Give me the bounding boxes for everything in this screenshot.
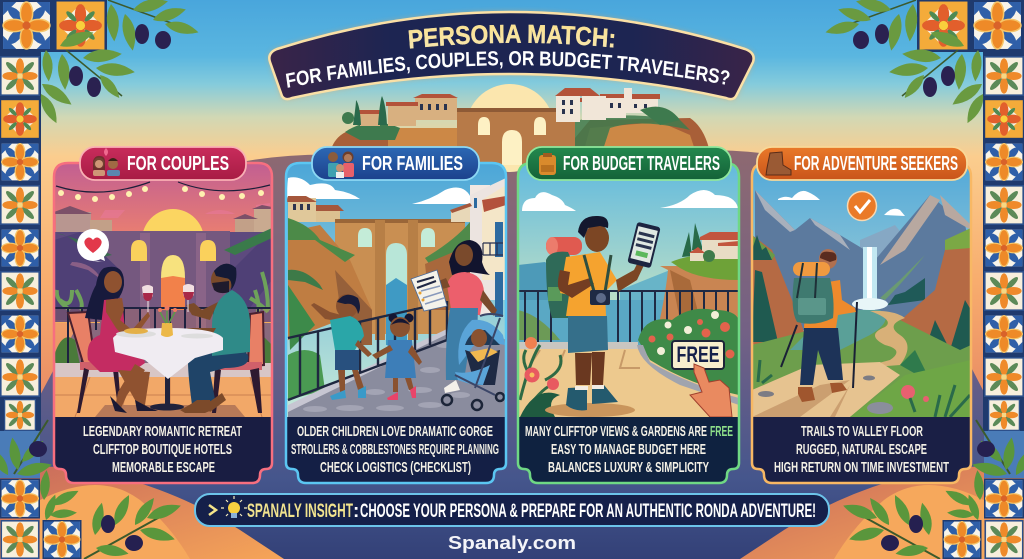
right chair	[212, 312, 264, 413]
hiker	[781, 249, 857, 402]
card frame	[518, 163, 739, 483]
families bullet list: STROLLERS & COBBLESTONES REQUIRE PLANNING	[291, 441, 499, 458]
icon: light bulb	[221, 496, 247, 518]
adventure bullet list	[774, 423, 949, 476]
string lights	[56, 182, 270, 202]
icon: hiking boot	[766, 152, 791, 175]
insight callout bar	[195, 494, 829, 526]
head	[585, 224, 609, 252]
decorative tiles and olives: bottom right	[841, 420, 1024, 559]
budget bullet list: EASY TO MANAGE BUDGET HERE	[551, 441, 706, 458]
illustration: backpacker with phone	[518, 163, 739, 483]
panel: for adventure seekers	[752, 147, 971, 483]
title line 1: PERSONA MATCH:	[408, 24, 614, 49]
header pill: for couples: FOR COUPLES	[127, 153, 229, 175]
decorative tiles and olives: bottom left	[0, 420, 183, 559]
caption block	[54, 417, 272, 483]
panel: for families	[286, 147, 506, 483]
phone	[627, 222, 661, 268]
panel: for budget travelers	[518, 147, 739, 483]
title line 2: FOR FAMILIES, COUPLES, OR BUDGET TRAVELERS?	[286, 51, 730, 88]
header pill: for couples	[80, 147, 246, 180]
title banner	[266, 8, 757, 102]
families bullet list: OLDER CHILDREN LOVE DRAMATIC GORGE	[297, 423, 493, 440]
header pill: for budget travelers	[527, 147, 731, 180]
adventure bullet list: TRAILS TO VALLEY FLOOR	[801, 423, 923, 440]
girl	[372, 314, 422, 400]
header pill: for families	[312, 147, 479, 180]
background hills and dusk valley	[0, 150, 1024, 559]
insight callout bar: :	[353, 501, 359, 522]
FREE tag: FREE	[676, 342, 720, 367]
couples bullet list: LEGENDARY ROMANTIC RETREAT	[83, 423, 242, 440]
camera	[590, 290, 610, 305]
families bullet list: CHECK LOGISTICS (CHECKLIST)	[320, 459, 471, 476]
couples bullet list: MEMORABLE ESCAPE	[112, 459, 215, 476]
card frame	[54, 163, 272, 483]
woman	[85, 267, 158, 413]
card frame	[752, 163, 971, 483]
left chair	[68, 312, 122, 413]
illustration: romantic terrace dinner	[54, 163, 272, 483]
card frame	[286, 163, 506, 483]
footer brand: Spanaly.com	[448, 532, 576, 553]
icon: chevron	[209, 505, 216, 515]
mother	[440, 240, 497, 393]
header pill: for budget travelers: FOR BUDGET TRAVELERS	[563, 153, 720, 175]
couples bullet list	[83, 423, 242, 476]
checklist	[411, 270, 447, 311]
panel: for couples	[54, 147, 272, 483]
adventure bullet list: RUGGED, NATURAL ESCAPE	[796, 441, 927, 458]
man	[180, 264, 250, 413]
insight callout bar: SPANALY INSIGHT	[247, 501, 353, 522]
families bullet list	[291, 423, 499, 476]
illustration: hiker overlooking valley	[752, 163, 971, 483]
icon: heart speech bubble	[77, 229, 109, 262]
boy	[311, 294, 372, 400]
icon: couple with heart	[93, 148, 120, 176]
budget bullet list: BALANCES LUXURY & SIMPLICITY	[548, 459, 709, 476]
budget bullet list: MANY CLIFFTOP VIEWS & GARDENS ARE	[525, 423, 707, 440]
couples bullet list: CLIFFTOP BOUTIQUE HOTELS	[93, 441, 232, 458]
cobblestone path	[288, 334, 505, 417]
backpacker	[546, 216, 661, 410]
decorative tile border and olives: top left	[0, 0, 200, 432]
flowers foreground	[520, 337, 561, 417]
table	[113, 306, 223, 410]
Ronda town and bridge skyline	[328, 84, 712, 172]
illustration: family on the bridge walkway	[286, 163, 506, 483]
backpack	[546, 252, 570, 318]
railing	[518, 291, 739, 342]
title line 1	[408, 24, 614, 49]
distant cliff and villa	[660, 223, 738, 320]
wine glasses	[142, 284, 194, 312]
stroller	[442, 314, 505, 410]
icon: backpack	[539, 153, 556, 175]
header pill: for adventure seekers	[757, 147, 967, 180]
body	[560, 252, 617, 316]
decorative tile border and olives: top right	[824, 0, 1024, 432]
budget bullet list: FREE	[710, 423, 733, 440]
flower bush	[637, 309, 739, 405]
header pill: for families: FOR FAMILIES	[362, 153, 463, 175]
FREE tag	[672, 341, 724, 369]
icon: family	[328, 152, 354, 178]
railing	[288, 301, 447, 400]
icon: check badge	[848, 192, 876, 220]
icon: pointing hand	[690, 364, 732, 417]
budget bullet list	[525, 423, 733, 476]
bedroll	[546, 237, 582, 255]
